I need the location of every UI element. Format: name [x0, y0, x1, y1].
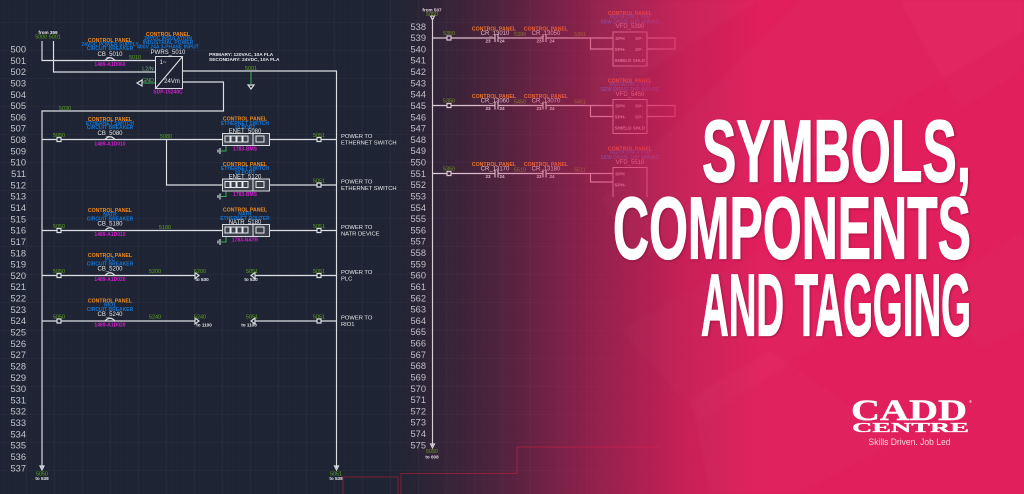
- schematic drawing: [10, 8, 675, 494]
- left ladder wiring: [40, 41, 338, 470]
- control relay contacts row 545: CR_13070: [532, 98, 561, 104]
- breaker CB_5180: NATR: [103, 212, 117, 218]
- drive VFD_5450: CONTROL PANEL: [608, 78, 653, 84]
- breaker CB_5180: 1489-A1D010: [94, 232, 126, 238]
- right rung numbers 538 to 575: 545: [410, 101, 426, 111]
- right rung numbers 538 to 575: 561: [410, 282, 426, 292]
- right rung numbers 538 to 575: 558: [410, 248, 426, 258]
- left rung numbers 500 to 537: 513: [10, 192, 26, 202]
- right rung numbers 538 to 575: 566: [410, 339, 426, 349]
- wire number tags: 5051: [313, 224, 325, 230]
- power supply transformer PWRS_5010: 1~: [160, 60, 167, 66]
- control relay contacts row 539: [443, 26, 586, 44]
- left rung numbers 500 to 537: 511: [11, 169, 26, 179]
- right rung numbers 538 to 575: 547: [410, 124, 426, 134]
- breaker CB_5240: 1489-A1D020: [94, 322, 126, 328]
- drive VFD_5450: SHLD: [633, 126, 646, 130]
- breaker CB_5010: 1489-A1D060: [94, 62, 126, 68]
- ethernet switch ENET_5080: ETHERNET SWITCH: [221, 121, 269, 127]
- right rung numbers 538 to 575: 568: [410, 361, 426, 371]
- right rung numbers 538 to 575: 548: [410, 135, 426, 145]
- power supply transformer PWRS_5010: 5010: [129, 55, 141, 61]
- left rung numbers 500 to 537: 505: [10, 101, 26, 111]
- control relay contacts row 551: 23: [485, 174, 491, 179]
- power supply transformer PWRS_5010: SECONDARY: 24VDC, 10A FLA: [209, 57, 280, 63]
- control relay contacts row 545: 24: [499, 106, 505, 111]
- left rung numbers 500 to 537: 530: [10, 384, 26, 394]
- drive VFD_5450: SPH-: [615, 114, 626, 120]
- left rung numbers 500 to 537: 532: [10, 407, 26, 417]
- ethernet switch ENET_5080: CONTROL PANEL: [223, 116, 268, 122]
- power supply transformer PWRS_5010: PWRS_5010: [151, 50, 186, 56]
- drive VFD_5510: [600, 146, 660, 197]
- control relay contacts row 545: 24: [549, 106, 555, 111]
- control relay contacts row 551: [443, 162, 586, 179]
- drive VFD_5390: SP-: [635, 47, 643, 52]
- power supply transformer PWRS_5010: CONTROL PANEL: [146, 32, 191, 38]
- breaker CB_5240: [87, 298, 134, 328]
- load descriptions: POWER TO: [341, 270, 373, 276]
- left rung numbers 500 to 537: 534: [10, 429, 26, 439]
- drive VFD_5390: SPH: [615, 36, 625, 41]
- control relay contacts row 551: CR_13170: [481, 166, 510, 172]
- right rung numbers 538 to 575: 563: [410, 305, 426, 315]
- control relay contacts row 551: 24: [549, 174, 555, 179]
- right ladder wiring: from 507: [422, 8, 442, 12]
- drive VFD_5510: AGITATOR 3 VFD: [610, 150, 651, 156]
- right rung numbers 538 to 575: 543: [410, 78, 426, 88]
- pink gradient overlay: [380, 0, 760, 494]
- control relay contacts row 551: 5511: [574, 168, 586, 174]
- source tags: to 538: [35, 476, 49, 481]
- wire number tags: 5200: [194, 269, 206, 275]
- left rung numbers 500 to 537: 502: [10, 67, 26, 77]
- source tags: 5051: [330, 472, 342, 478]
- wire number tags: 5050: [53, 314, 65, 320]
- ethernet switch ENET_5080: ENET_5080: [229, 129, 262, 135]
- left rung numbers 500 to 537: 536: [10, 452, 26, 462]
- wire number tags: to 530: [195, 277, 209, 282]
- ethernet switch ENET_5120: ETHERNET SWITCH: [221, 166, 269, 172]
- right rung numbers 538 to 575: 565: [410, 327, 426, 337]
- control relay contacts row 539: 5391: [574, 32, 586, 38]
- right rung numbers 538 to 575: 553: [410, 192, 426, 202]
- wire number tags: 5050: [53, 269, 65, 275]
- breaker CB_5010: [81, 38, 139, 68]
- drive VFD_5510: CONTROL PANEL: [608, 146, 653, 152]
- wire number tags: 5051: [313, 314, 325, 320]
- left rung numbers 500 to 537: 525: [10, 328, 26, 338]
- breaker CB_5080: CB_5080: [97, 131, 123, 137]
- ethernet switch ENET_5120: 1783-BMS: [233, 192, 258, 198]
- ethernet switch ENET_5120: 10 PORT: [235, 170, 255, 176]
- drive VFD_5510: SEW DRIVE 3HP 400VAC: [600, 155, 660, 161]
- control relay contacts row 539: CONTROL PANEL: [524, 26, 569, 32]
- right ladder wiring: to 608: [425, 454, 439, 460]
- right rung numbers 538 to 575: 552: [410, 180, 426, 190]
- red outline lines at bottom: [343, 447, 660, 494]
- drive VFD_5390: [600, 11, 660, 66]
- control relay contacts row 545: CR_13060: [481, 98, 510, 104]
- right rung numbers 538 to 575: 538: [410, 22, 426, 32]
- ethernet switch ENET_5120: [218, 162, 270, 200]
- control relay contacts row 545: 5350: [443, 98, 455, 104]
- left rung numbers 500 to 537: 527: [10, 350, 26, 360]
- control relay contacts row 551: 5510: [514, 168, 526, 174]
- right rung numbers 538 to 575: 562: [410, 293, 426, 303]
- breaker CB_5200: [87, 253, 134, 283]
- wire number tags: to 1100: [196, 322, 212, 328]
- left rung numbers 500 to 537: 526: [10, 339, 26, 349]
- drive VFD_5390: SP-: [635, 36, 643, 41]
- breaker CB_5200: CIRCUIT BREAKER: [87, 262, 134, 268]
- wire number tags: 5051: [313, 133, 325, 139]
- drive VFD_5390: VFD_5390: [616, 24, 645, 30]
- breaker CB_5080: CIRCUIT BREAKER: [87, 125, 134, 131]
- control relay contacts row 539: 24: [549, 38, 555, 44]
- breaker CB_5180: [87, 208, 134, 238]
- drive VFD_5390: SEW DRIVE 3HP 400VAC: [600, 20, 660, 26]
- ethernet switch ENET_5120: CONTROL PANEL: [223, 162, 268, 168]
- load descriptions: RIO1: [341, 322, 355, 328]
- right rung numbers 538 to 575: 550: [410, 158, 426, 168]
- router NATR_5180: ETHERNET ROUTER: [220, 216, 270, 222]
- right rung numbers 538 to 575: 575: [410, 440, 426, 450]
- breaker CB_5080: [86, 117, 134, 148]
- breaker CB_5180: CIRCUIT BREAKER: [87, 216, 134, 222]
- wire number tags: 5050: [53, 224, 65, 230]
- load descriptions: PLC: [341, 276, 352, 282]
- left rung numbers 500 to 537: 514: [10, 203, 26, 213]
- left rung numbers 500 to 537: 528: [10, 362, 26, 372]
- load descriptions: [341, 134, 397, 328]
- left rung numbers 500 to 537: 515: [10, 214, 26, 224]
- drive VFD_5450: AGITATOR 2 VFD: [610, 82, 651, 88]
- breaker CB_5240: RIO1: [104, 302, 116, 308]
- control relay contacts row 551: CONTROL PANEL: [472, 162, 517, 168]
- drive VFD_5450: [600, 78, 660, 134]
- breaker CB_5180: CONTROL PANEL: [88, 208, 133, 214]
- breaker CB_5200: PLC: [105, 257, 115, 263]
- power supply transformer PWRS_5010: PRIMARY: 120VAC, 10A FLA: [209, 52, 274, 58]
- source tags: 5000 5001: [35, 34, 61, 40]
- left rung numbers 500 to 537: 520: [10, 271, 26, 281]
- right rung numbers 538 to 575: 539: [410, 33, 426, 43]
- right rung numbers 538 to 575: 570: [410, 384, 426, 394]
- right rung numbers 538 to 575: 546: [410, 112, 426, 122]
- left rung numbers 500 to 537: 508: [10, 135, 26, 145]
- title: [613, 102, 971, 354]
- breaker CB_5240: CIRCUIT BREAKER: [87, 307, 134, 313]
- wire number tags: 5240: [194, 314, 206, 320]
- wire number tags: 5240: [149, 314, 161, 320]
- right rung numbers 538 to 575: 554: [410, 203, 426, 213]
- left rung numbers 500 to 537: 529: [10, 373, 26, 383]
- drive VFD_5390: SHLD: [633, 58, 646, 63]
- wire number tags: 5051: [246, 314, 258, 320]
- breaker CB_5200: CONTROL PANEL: [88, 253, 133, 259]
- breaker CB_5240: CONTROL PANEL: [88, 298, 133, 304]
- right rung numbers 538 to 575: 540: [410, 44, 426, 54]
- control relay contacts row 545: [443, 94, 586, 111]
- right rung numbers 538 to 575: 557: [410, 237, 426, 247]
- left rung numbers 500 to 537: 509: [10, 146, 26, 156]
- control relay contacts row 551: 24: [499, 174, 505, 179]
- drive VFD_5390: SHIELD: [615, 58, 632, 63]
- right rung numbers 538 to 575: 569: [410, 372, 426, 382]
- right rung numbers 538 to 575: 560: [410, 271, 426, 281]
- control relay contacts row 551: CONTROL PANEL: [524, 162, 569, 168]
- load descriptions: POWER TO: [341, 134, 373, 140]
- ethernet switch ENET_5080: [218, 116, 270, 154]
- left rung numbers 500 to 537: 531: [10, 395, 26, 405]
- drive VFD_5390: AGITATOR 1 VFD: [610, 14, 651, 20]
- drive VFD_5450: VFD_5450: [616, 92, 645, 98]
- right rung numbers 538 to 575: 572: [410, 406, 426, 416]
- power supply transformer PWRS_5010: L2/N: [142, 66, 154, 72]
- left rung numbers 500 to 537: 503: [10, 78, 26, 88]
- control relay contacts row 539: 24: [499, 38, 505, 44]
- left rung numbers 500 to 537: 524: [10, 316, 26, 326]
- left rung numbers 500 to 537: 518: [10, 248, 26, 258]
- power supply transformer PWRS_5010: 5001: [245, 66, 257, 72]
- left rung numbers 500 to 537: 510: [10, 158, 26, 168]
- drive VFD_5390: SPH-: [615, 47, 626, 52]
- wire number tags: 5050: [53, 133, 65, 139]
- router NATR_5180: NATR_5180: [229, 220, 262, 226]
- source tags: [35, 30, 343, 481]
- right rung numbers 538 to 575: 551: [410, 169, 426, 179]
- load descriptions: POWER TO: [341, 180, 373, 186]
- load descriptions: POWER TO: [341, 316, 373, 322]
- left rung numbers 500 to 537: 504: [10, 90, 26, 100]
- wire number tags: 5180: [159, 225, 171, 231]
- wire number tags: 5051: [313, 269, 325, 275]
- right ladder wiring: [422, 8, 675, 460]
- control relay contacts row 539: 23: [536, 38, 542, 44]
- control relay contacts row 551: 23: [536, 174, 542, 179]
- control relay contacts row 539: 5350: [443, 31, 455, 37]
- control relay contacts row 539: CONTROL PANEL: [472, 26, 517, 32]
- drive VFD_5390: CONTROL PANEL: [608, 11, 653, 17]
- control relay contacts row 545: 23: [485, 106, 491, 111]
- source tags: 5050: [36, 472, 48, 478]
- right ladder wiring: 5050: [426, 12, 438, 18]
- left rung numbers 500 to 537: 517: [10, 237, 26, 247]
- power supply transformer PWRS_5010: 24VDC INSULATION: [144, 36, 192, 42]
- control relay contacts row 539: CR_13010: [481, 31, 510, 37]
- power supply transformer PWRS_5010: 24Vm: [164, 79, 180, 85]
- logo: CADD Centre: Skills Driven. Job Led: [868, 437, 950, 447]
- left rung numbers 500 to 537: 519: [10, 260, 26, 270]
- control relay contacts row 539: 23: [485, 38, 491, 44]
- logo: CADD Centre: CADD: [851, 394, 967, 427]
- breaker CB_5080: ETHERNET SWITCH: [86, 121, 134, 127]
- faint building shapes on pink: [590, 0, 1024, 494]
- ethernet switch ENET_5080: 10 PORT: [235, 125, 255, 131]
- logo: CADD Centre: [851, 394, 972, 447]
- right rung numbers 538 to 575: 544: [410, 90, 426, 100]
- right rung numbers 538 to 575: [410, 22, 426, 450]
- control relay contacts row 545: CONTROL PANEL: [524, 94, 569, 100]
- source tags: from 359: [38, 30, 58, 35]
- control relay contacts row 551: 5350: [443, 166, 455, 172]
- power supply transformer PWRS_5010: GND: [142, 78, 154, 84]
- load descriptions: POWER TO: [341, 225, 373, 231]
- router NATR_5180: 1783-NATR: [232, 238, 259, 244]
- control relay contacts row 545: CONTROL PANEL: [472, 94, 517, 100]
- ethernet switch ENET_5120: ENET_5120: [229, 174, 262, 180]
- right rung numbers 538 to 575: 571: [410, 395, 426, 405]
- breaker CB_5080: CONTROL PANEL: [88, 117, 133, 123]
- left rung numbers 500 to 537: 522: [10, 294, 26, 304]
- right rung numbers 538 to 575: 556: [410, 225, 426, 235]
- control relay contacts row 539: CR_13050: [532, 31, 561, 37]
- wire number tags: to 1100: [241, 322, 257, 328]
- left rung numbers 500 to 537: 533: [10, 418, 26, 428]
- ethernet switch ENET_5080: 1783-BMS: [233, 146, 258, 152]
- control relay contacts row 545: 5450: [514, 100, 526, 106]
- drive VFD_5510: SPH: [615, 172, 625, 176]
- right ladder wiring: 5050: [426, 449, 438, 455]
- power supply transformer PWRS_5010: [59, 32, 280, 112]
- breaker CB_5010: CB_5010: [97, 52, 123, 58]
- wire number tags: to 530: [244, 277, 258, 282]
- drive VFD_5510: VFD_5510: [616, 160, 645, 166]
- right rung numbers 538 to 575: 542: [410, 67, 426, 77]
- drive VFD_5510: SPH-: [615, 182, 626, 188]
- right rung numbers 538 to 575: 574: [410, 429, 426, 439]
- right rung numbers 538 to 575: 559: [410, 259, 426, 269]
- wire number tags: 5080: [160, 134, 172, 140]
- breaker CB_5240: CB_5240: [97, 312, 123, 318]
- right rung numbers 538 to 575: 567: [410, 350, 426, 360]
- drive VFD_5450: SHIELD: [615, 126, 632, 130]
- control relay contacts row 545: 5451: [574, 100, 586, 106]
- logo: CADD Centre: ®: [969, 399, 972, 404]
- left rung numbers 500 to 537: 501: [10, 56, 26, 66]
- left rung numbers 500 to 537: 535: [10, 441, 26, 451]
- left rung numbers 500 to 537: 506: [10, 112, 26, 122]
- control relay contacts row 539: 5390: [514, 32, 526, 38]
- load descriptions: NATR DEVICE: [341, 232, 380, 238]
- drive VFD_5450: SP-: [635, 104, 643, 108]
- router NATR_5180: NATR: [238, 212, 252, 218]
- drive VFD_5450: SP-: [635, 114, 643, 120]
- right rung numbers 538 to 575: 541: [410, 56, 426, 66]
- drive VFD_5450: SEW DRIVE 3HP 400VAC: [600, 87, 660, 93]
- left rung numbers 500 to 537: 523: [10, 305, 26, 315]
- left rung numbers 500 to 537: 512: [10, 180, 26, 190]
- breaker CB_5010: CIRCUIT BREAKER: [87, 46, 134, 52]
- logo: CADD Centre: CENTRE: [852, 421, 969, 436]
- breaker CB_5010: CONTROL PANEL: [88, 38, 133, 44]
- drive VFD_5450: SPH: [615, 104, 625, 108]
- breaker CB_5200: 1489-A1D020: [94, 277, 126, 283]
- load descriptions: ETHERNET SWITCH: [341, 140, 397, 146]
- left rung numbers 500 to 537: 507: [10, 124, 26, 134]
- right rung numbers 538 to 575: 573: [410, 418, 426, 428]
- wire number tags: 5051: [246, 269, 258, 275]
- left rung numbers 500 to 537: [10, 44, 26, 473]
- wire number tags: 5051: [313, 178, 325, 184]
- control relay contacts row 545: 23: [536, 106, 542, 111]
- right rung numbers 538 to 575: 549: [410, 146, 426, 156]
- router NATR_5180: [218, 208, 270, 245]
- left rung numbers 500 to 537: 537: [10, 463, 26, 473]
- power supply transformer PWRS_5010: INDUSTRIAL POWER: [143, 40, 194, 46]
- power supply transformer PWRS_5010: SDP-15240C: [153, 90, 183, 96]
- right rung numbers 538 to 575: 555: [410, 214, 426, 224]
- source tags: to 538: [329, 476, 343, 481]
- left rung numbers 500 to 537: 521: [10, 282, 26, 292]
- control relay contacts row 551: CR_13180: [532, 166, 561, 172]
- breaker CB_5080: 1489-A1D010: [94, 142, 126, 148]
- load descriptions: ETHERNET SWITCH: [341, 186, 397, 192]
- breaker CB_5200: CB_5200: [97, 266, 123, 272]
- right rung numbers 538 to 575: 564: [410, 316, 426, 326]
- power supply transformer PWRS_5010: 400V 24A 3-PHASE INPUT: [137, 44, 199, 50]
- breaker CB_5180: CB_5180: [97, 222, 123, 228]
- wire number tags: [53, 133, 325, 328]
- breaker CB_5010: 24VDC POWER SUPPLY: [81, 42, 139, 48]
- left rung numbers 500 to 537: 500: [10, 44, 26, 54]
- power supply transformer PWRS_5010: 5030: [59, 106, 71, 112]
- wire number tags: 5200: [149, 269, 161, 275]
- left rung numbers 500 to 537: 516: [10, 226, 26, 236]
- router NATR_5180: CONTROL PANEL: [223, 208, 268, 214]
